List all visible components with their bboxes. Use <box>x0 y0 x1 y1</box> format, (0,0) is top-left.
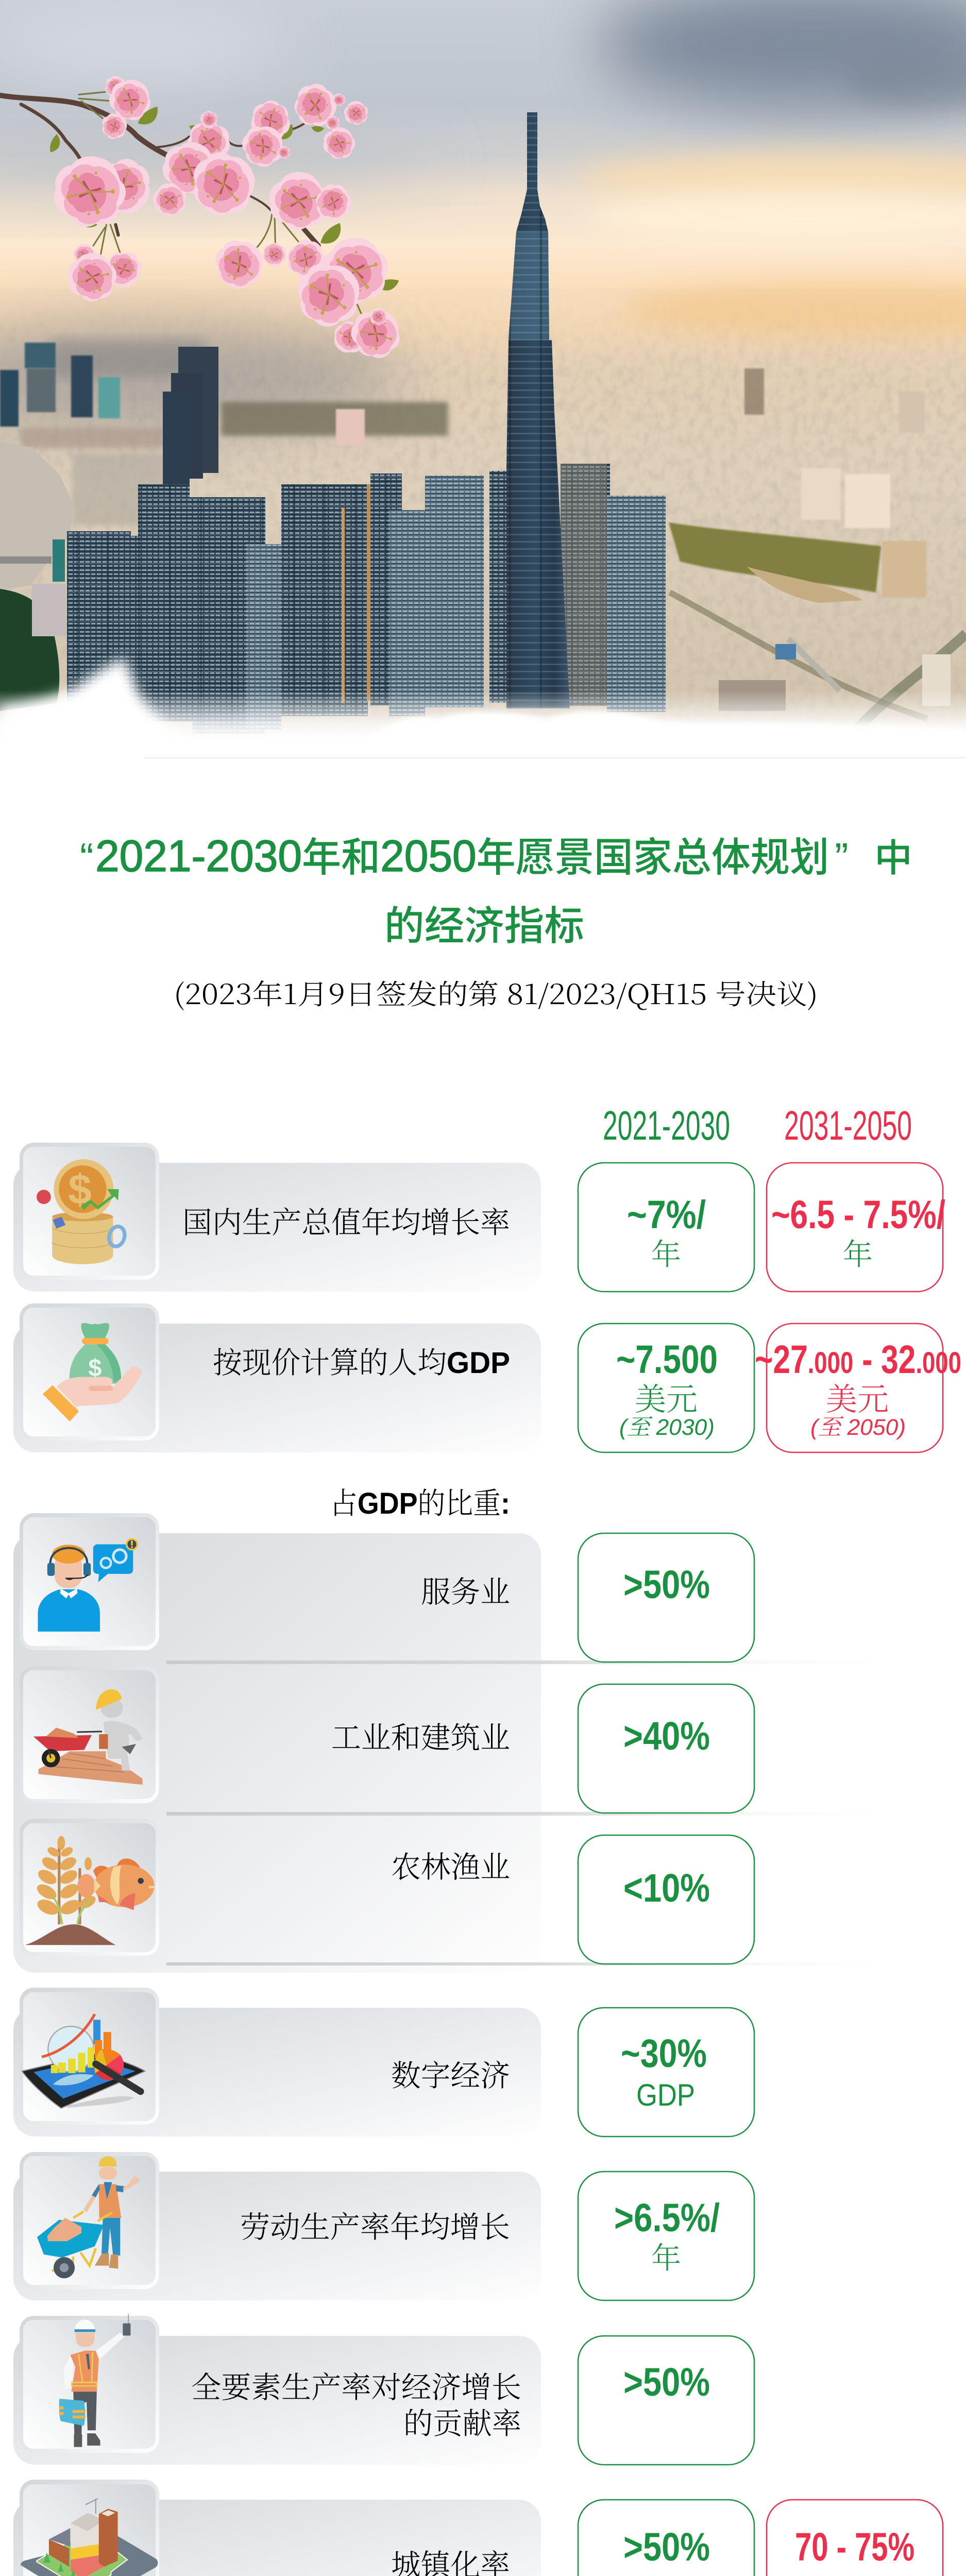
panel: GDP share group <box>13 1513 912 1973</box>
value box: ~27.000 - 32.000 USD: 美元 <box>826 1375 889 1419</box>
icon: money bag in hand <box>43 1323 142 1421</box>
title: 中 <box>874 827 912 883</box>
card: services <box>20 1513 159 1650</box>
flowers <box>33 66 416 375</box>
subtitle: (2023年1月9日签发的第 81/2023/QH15 号决议) <box>174 973 818 1012</box>
cherry blossom branch <box>0 66 416 375</box>
row: digital economy <box>13 1988 541 2137</box>
label: 的贡献率 <box>403 2399 521 2443</box>
label: agriculture: 农林渔业 <box>391 1843 510 1886</box>
icon: worker with wheelbarrow <box>37 2156 141 2278</box>
icon: money bag in hand: $ <box>88 1354 101 1381</box>
value box: >6.5%/年: >6.5%/ <box>614 2196 720 2240</box>
rear dark towers <box>163 347 218 484</box>
value box: >50% <box>578 1533 754 1662</box>
card: agriculture, forestry and fisheries <box>20 1819 159 1956</box>
value box: ~7.500 USD <box>578 1324 754 1452</box>
icon: engineer with radio and case <box>59 2314 130 2447</box>
icon: coin stack <box>37 1159 127 1264</box>
label: services: 服务业 <box>421 1568 510 1611</box>
icon: isometric building block <box>21 2499 158 2576</box>
value box: ~7%/年: ~7%/ <box>627 1193 706 1237</box>
value box: ~7.500 USD: (至 2030) <box>619 1415 715 1440</box>
title <box>80 825 912 952</box>
label: 按现价计算的人均GDP <box>213 1338 510 1382</box>
value box: >40%: >40% <box>623 1714 710 1758</box>
row: GDP growth <box>13 1143 541 1292</box>
city background blocks <box>0 340 926 598</box>
value box: >50% urban <box>578 2500 754 2576</box>
value box: ~6.5 - 7.5%/年: 年 <box>843 1230 873 1274</box>
value box: >50%: >50% <box>623 1563 710 1607</box>
title: ” <box>835 835 849 880</box>
value box: ~27.000 - 32.000 USD: (至 2050) <box>810 1415 906 1440</box>
value box: ~30% GDP <box>578 2008 754 2137</box>
value box: ~30% GDP: ~30% <box>621 2031 707 2076</box>
value box: 70 - 75%: 70 - 75% <box>795 2525 914 2569</box>
icon: tablet with charts <box>22 2014 145 2108</box>
foreground residential towers <box>67 464 666 734</box>
row: GDP per capita <box>13 1303 541 1452</box>
label: 劳动生产率年均增长 <box>240 2203 510 2246</box>
row: urbanization <box>13 2480 541 2576</box>
row: labour productivity <box>13 2152 541 2300</box>
value box: ~27.000 - 32.000 USD <box>755 1324 961 1452</box>
hero photo: Ho Chi Minh City skyline <box>0 0 966 759</box>
value box: ~7.500 USD: 美元 <box>635 1375 698 1419</box>
leaves <box>44 107 399 294</box>
value box: >50% TFP <box>578 2336 754 2465</box>
value box: >50% urban: >50% <box>623 2525 710 2569</box>
title: 的经济指标 <box>384 894 584 952</box>
value box: >6.5%/年 <box>578 2172 754 2300</box>
title: “ <box>80 835 94 880</box>
label <box>191 2363 521 2443</box>
park and canal <box>669 522 881 592</box>
Landmark 81 tower <box>506 112 570 708</box>
branches <box>0 92 366 326</box>
value box: ~7%/年: 年 <box>651 1230 681 1274</box>
label: 全要素生产率对经济增长 <box>191 2363 521 2406</box>
value box: 70 - 75% <box>767 2500 943 2576</box>
value box: >50% TFP: >50% <box>623 2360 710 2404</box>
label: 数字经济 <box>391 2052 510 2095</box>
icon: coin stack: $ <box>68 1166 92 1213</box>
group heading: share of GDP: 占GDP的比重: <box>330 1479 510 1522</box>
bottom mist fade <box>0 659 966 759</box>
value box: ~7%/年 <box>578 1163 754 1292</box>
value box: ~6.5 - 7.5%/年 <box>767 1163 945 1292</box>
label: industry: 工业和建筑业 <box>331 1714 510 1757</box>
value box: ~7.500 USD: ~7.500 <box>616 1337 718 1382</box>
card: industry and construction <box>20 1666 159 1803</box>
value box: >6.5%/年: 年 <box>651 2234 681 2277</box>
value box: >40% <box>578 1684 754 1813</box>
value box: ~30% GDP: GDP <box>636 2078 695 2112</box>
river and left bank <box>0 441 74 590</box>
label: 国内生产总值年均增长率 <box>182 1198 510 1242</box>
value box: <10%: <10% <box>623 1866 710 1910</box>
value box: <10% <box>578 1835 754 1964</box>
title: 2021-2030年和2050年愿景国家总体规划 <box>95 825 829 883</box>
row: TFP contribution <box>13 2314 541 2465</box>
column header: 2021-2030: 2021-2030 <box>603 1103 730 1148</box>
